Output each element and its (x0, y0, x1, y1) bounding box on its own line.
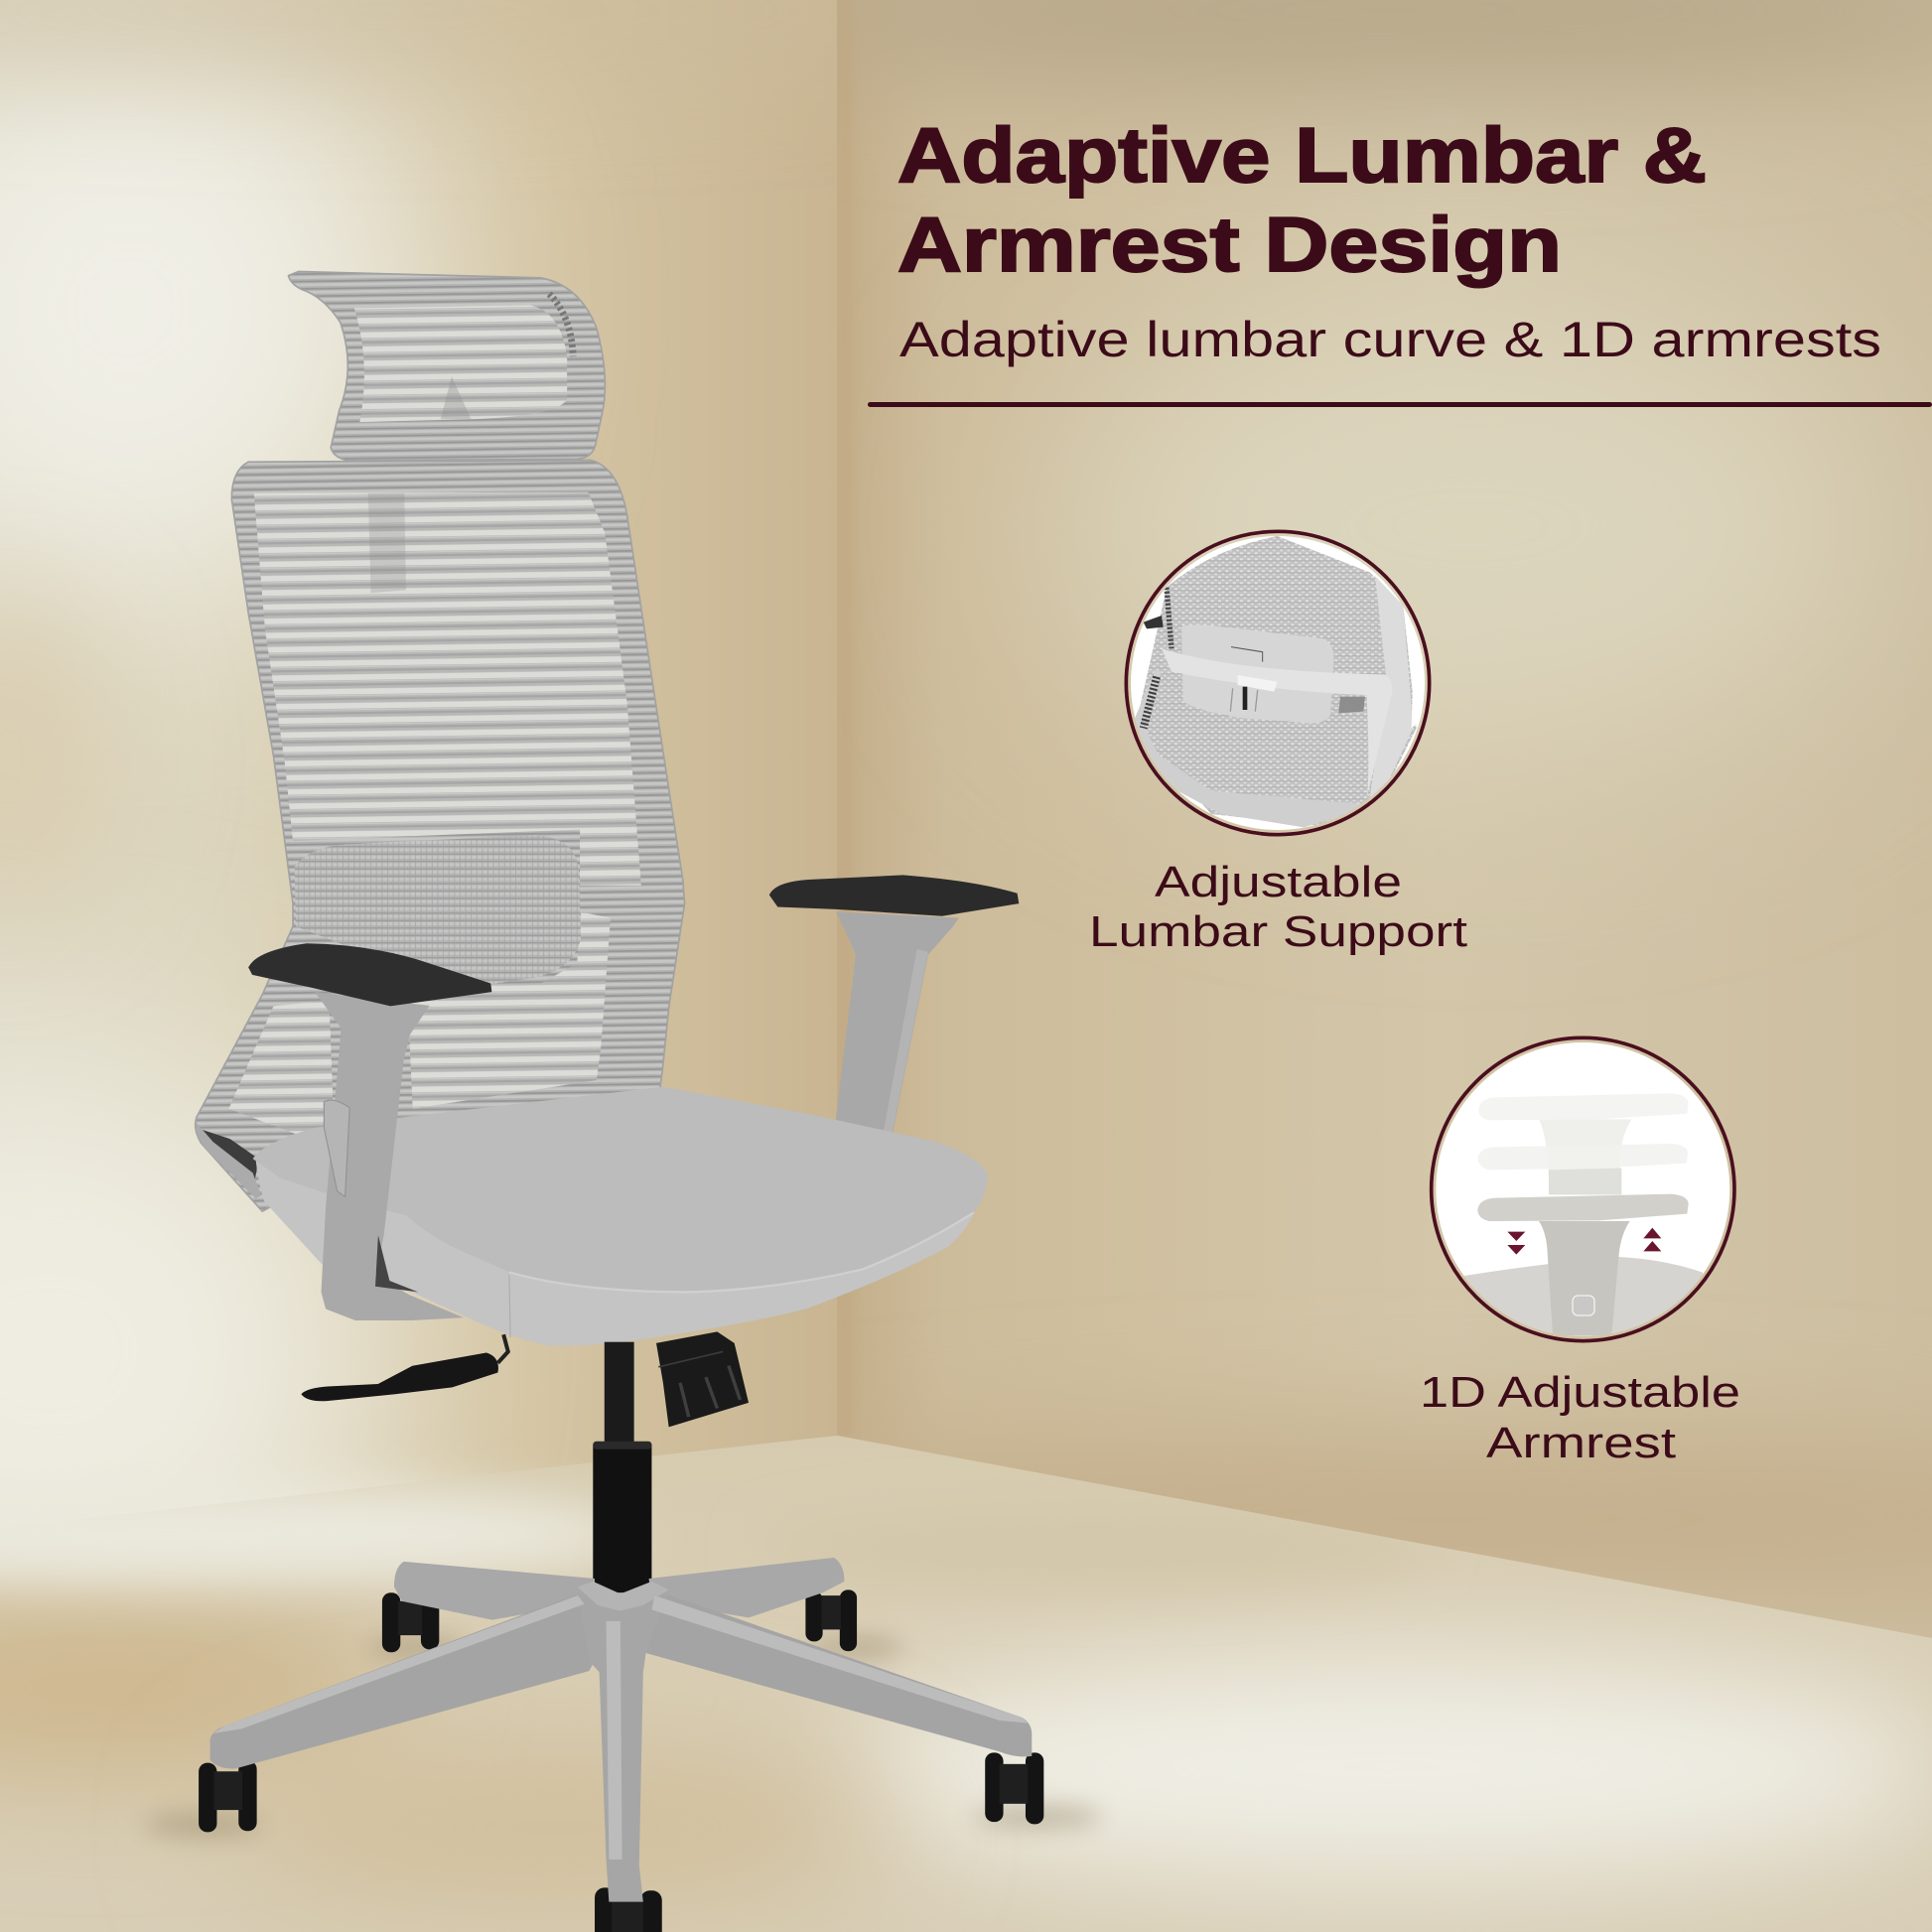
tension knob (656, 1331, 749, 1427)
floor (0, 1430, 1932, 1932)
seat side (255, 1159, 977, 1346)
lever (301, 1334, 508, 1401)
heading underline (868, 402, 1932, 407)
back frame lower corner (196, 1128, 258, 1192)
armrest circle ring (1432, 1037, 1734, 1341)
lower chair (196, 992, 1043, 1932)
right armrest post (835, 912, 959, 1137)
subtitle: Adaptive lumbar curve & 1D armrests (899, 312, 1881, 367)
seat top (253, 1087, 988, 1292)
lumbar pad (295, 835, 581, 989)
armrest pads (248, 875, 1019, 1006)
armrest label: 1D Adjustable (1420, 1368, 1740, 1417)
back mesh (196, 461, 685, 1211)
armrest label (1420, 1368, 1740, 1467)
lumbar label (1089, 858, 1467, 956)
right wall (837, 0, 1932, 1638)
armrest label: Armrest (1486, 1419, 1676, 1467)
lumbar label: Lumbar Support (1089, 907, 1467, 956)
lumbar circle photo (1122, 529, 1437, 844)
left wall (0, 0, 837, 1510)
base legs (210, 1558, 1032, 1902)
armrest circle photo (1430, 1035, 1737, 1347)
title (897, 111, 1707, 288)
callout: lumbar support (1089, 529, 1467, 956)
lumbar circle ring (1126, 531, 1430, 835)
title: Armrest Design (897, 201, 1562, 288)
soft bright band at the left floor line (0, 1482, 635, 1586)
left armrest pad (248, 943, 491, 1006)
chair shadows on floor (144, 1638, 1102, 1836)
casters (199, 1589, 1043, 1932)
adjustment arrows (1507, 1228, 1661, 1255)
gas lift stem and cylinder (593, 1342, 651, 1592)
left armrest post (315, 992, 464, 1320)
chair back and headrest (196, 272, 685, 1211)
right armrest pad (769, 875, 1019, 916)
lumbar label: Adjustable (1155, 858, 1402, 906)
headrest (289, 272, 605, 461)
title: Adaptive Lumbar & (897, 111, 1707, 199)
callout: armrest (1420, 1035, 1740, 1467)
chair (144, 272, 1102, 1932)
